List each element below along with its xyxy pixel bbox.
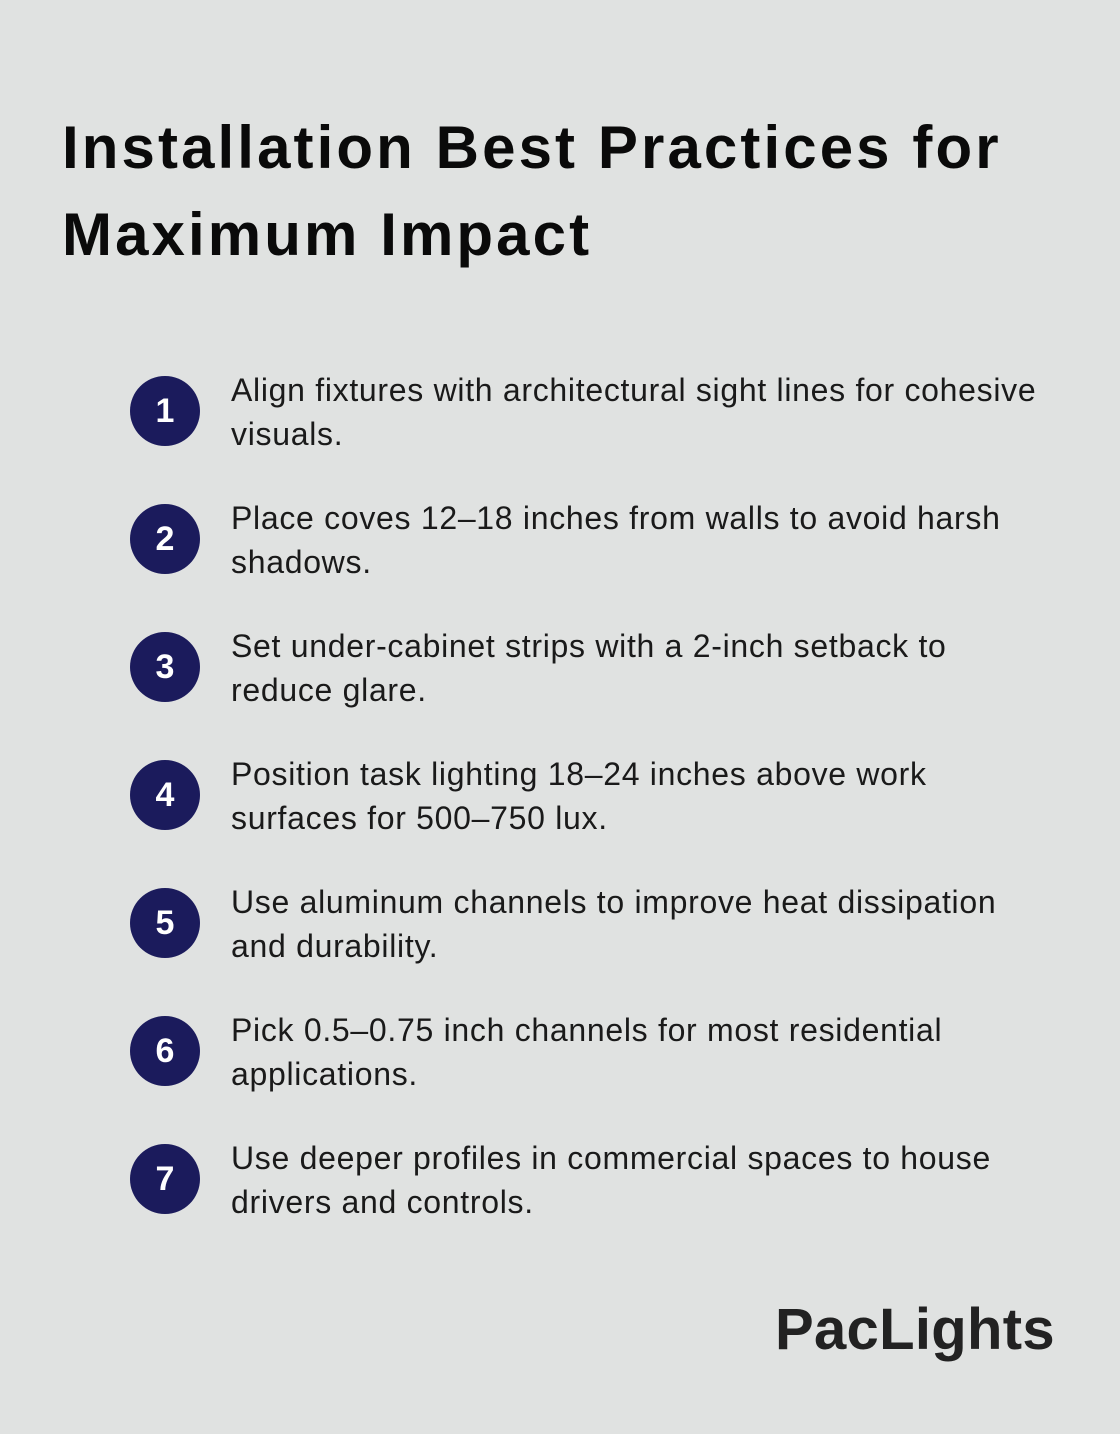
item 1: Align fixtures with architectural sight lines for cohesive <box>231 372 1036 408</box>
item 1 <box>130 372 1036 452</box>
item 2: 2 <box>156 520 174 558</box>
item 5: 5 <box>156 904 174 942</box>
item 3: Set under-cabinet strips with a 2-inch setback to <box>231 628 947 664</box>
item 7 <box>130 1140 991 1220</box>
item 7: drivers and controls. <box>231 1184 534 1220</box>
item 3: 3 <box>156 648 174 686</box>
item 1: visuals. <box>231 416 343 452</box>
item 6 <box>130 1012 942 1092</box>
item 3 <box>130 628 947 708</box>
item 2: shadows. <box>231 544 372 580</box>
item 4: surfaces for 500–750 lux. <box>231 800 608 836</box>
item 4: Position task lighting 18–24 inches above work <box>231 756 927 792</box>
item 6: 6 <box>156 1032 174 1070</box>
item 7: Use deeper profiles in commercial spaces to house <box>231 1140 991 1176</box>
item 4 <box>130 756 927 836</box>
item 6: applications. <box>231 1056 418 1092</box>
title <box>62 114 1002 268</box>
title: Maximum Impact <box>62 201 592 268</box>
item 6: Pick 0.5–0.75 inch channels for most residential <box>231 1012 942 1048</box>
item 5 <box>130 884 996 964</box>
item 2: Place coves 12–18 inches from walls to avoid harsh <box>231 500 1001 536</box>
item 5: Use aluminum channels to improve heat dissipation <box>231 884 996 920</box>
title: Installation Best Practices for <box>62 114 1002 181</box>
item 3: reduce glare. <box>231 672 427 708</box>
item 1: 1 <box>156 392 174 430</box>
item 5: and durability. <box>231 928 438 964</box>
item 4: 4 <box>156 776 174 814</box>
logo: PacLights <box>775 1297 1055 1362</box>
item 2 <box>130 500 1001 580</box>
item 7: 7 <box>156 1160 174 1198</box>
